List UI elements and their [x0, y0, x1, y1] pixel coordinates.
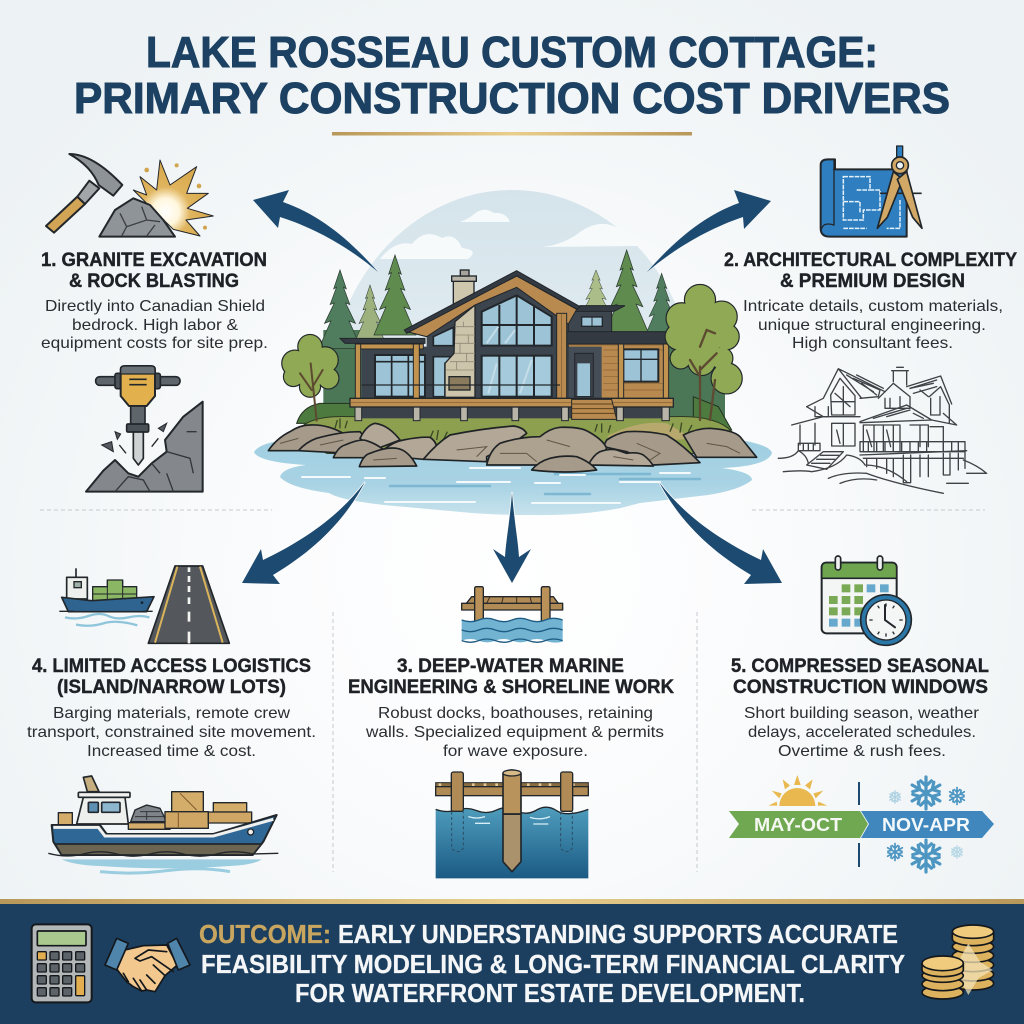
heading: ENGINEERING & SHORELINE WORK [348, 677, 674, 698]
heading: 1. GRANITE EXCAVATION [41, 250, 267, 271]
heading: 5. COMPRESSED SEASONAL [731, 656, 989, 677]
under-deck and supports [360, 407, 663, 418]
title: PRIMARY CONSTRUCTION COST DRIVERS [74, 75, 950, 123]
icon: handshake [105, 938, 190, 992]
outcome banner [0, 899, 1024, 1024]
outcome text [199, 919, 905, 1008]
water [254, 440, 772, 515]
shrubs [297, 397, 732, 430]
panel: driver 4 limited access logistics [27, 566, 316, 873]
great-room windows [482, 295, 552, 346]
description: High consultant fees. [792, 335, 953, 352]
central illustration: cottage on rocky island [254, 190, 772, 515]
icon: sun [768, 775, 827, 806]
arrow to driver 5 [659, 482, 782, 584]
season timeline graphic [729, 775, 994, 872]
description: bedrock. High labor & [72, 317, 238, 334]
badge: Nov-Apr: NOV-APR [882, 815, 970, 835]
panel: driver 1 granite excavation [41, 154, 268, 492]
grass tufts [335, 418, 692, 440]
steps [572, 399, 617, 419]
description: Barging materials, remote crew [53, 705, 290, 722]
icon: cargo ship and narrow road [59, 566, 229, 643]
badge: Nov-Apr [861, 811, 994, 838]
panel: driver 3 marine engineering [348, 587, 674, 878]
heading [348, 656, 674, 698]
icon: calculator [32, 924, 92, 1002]
title: LAKE ROSSEAU CUSTOM COTTAGE: [146, 29, 878, 77]
deciduous tree left [282, 335, 338, 421]
arrow to driver 4 [242, 482, 365, 584]
wall mass [362, 287, 568, 398]
heading [41, 250, 267, 292]
right wing [568, 340, 668, 398]
stone chimney [453, 277, 474, 307]
description [41, 298, 268, 352]
right dormer [568, 311, 612, 333]
icon: snowflakes [886, 777, 966, 872]
sky dome [328, 190, 696, 445]
panel: driver 5 seasonal windows [729, 556, 994, 872]
description: for wave exposure. [443, 743, 588, 760]
icon: loaded barge [48, 776, 278, 873]
heading [32, 656, 311, 698]
panel: driver 2 architectural complexity [724, 146, 1017, 493]
outcome text: OUTCOME: [199, 919, 331, 949]
outcome text: FOR WATERFRONT ESTATE DEVELOPMENT. [295, 978, 805, 1008]
description [743, 298, 1003, 352]
icon: calendar and clock [822, 556, 911, 645]
description: Increased time & cost. [87, 743, 256, 760]
icon: dock over waves [462, 587, 563, 643]
icon: jackhammer on rock [86, 366, 203, 492]
heading: & PREMIUM DESIGN [780, 271, 965, 292]
description: Robust docks, boathouses, retaining [378, 705, 653, 722]
description: Short building season, weather [744, 705, 980, 722]
description: equipment costs for site prep. [41, 335, 268, 352]
description: walls. Specialized equipment & permits [365, 724, 664, 741]
grass [296, 417, 732, 457]
icon: coin stacks [922, 925, 994, 999]
heading: 3. DEEP-WATER MARINE [397, 656, 624, 677]
icon: hammer and rock blast [46, 154, 213, 237]
outcome text: EARLY UNDERSTANDING SUPPORTS ACCURATE [338, 919, 898, 949]
cottage [340, 270, 688, 421]
arrow to driver 3 [493, 492, 531, 583]
arrow to driver 1 [253, 190, 378, 272]
granite shoreline rocks [268, 423, 757, 472]
heading: & ROCK BLASTING [69, 271, 239, 292]
deck [350, 398, 673, 407]
clouds [380, 210, 640, 259]
description: unique structural engineering. [758, 317, 986, 334]
heading: 4. LIMITED ACCESS LOGISTICS [32, 656, 311, 677]
arrow to driver 2 [647, 190, 771, 272]
heading [724, 250, 1017, 292]
description [365, 705, 664, 760]
icon: blueprint and compass [821, 146, 922, 237]
description [27, 705, 316, 760]
description: Intricate details, custom materials, [743, 298, 1003, 315]
left porch windows [375, 355, 425, 397]
left porch roof and posts [360, 344, 423, 349]
description [744, 705, 980, 760]
title [74, 29, 950, 123]
icon: dock piling section [436, 770, 588, 878]
main gable roof [407, 276, 577, 337]
description: transport, constrained site movement. [27, 724, 316, 741]
railing [362, 383, 560, 387]
badge: May-Oct [729, 811, 868, 838]
tall tree right [666, 285, 742, 420]
icon: pencil sketch of house [778, 367, 987, 493]
description: Overtime & rush fees. [778, 743, 946, 760]
outcome text: FEASIBILITY MODELING & LONG-TERM FINANCIAL CLARITY [201, 949, 905, 979]
background trees [319, 250, 725, 420]
description: delays, accelerated schedules. [748, 724, 976, 741]
description: Directly into Canadian Shield [45, 298, 265, 315]
badge: May-Oct: MAY-OCT [754, 815, 842, 835]
heading [731, 656, 989, 698]
heading: CONSTRUCTION WINDOWS [733, 677, 988, 698]
heading: (ISLAND/NARROW LOTS) [57, 677, 286, 698]
